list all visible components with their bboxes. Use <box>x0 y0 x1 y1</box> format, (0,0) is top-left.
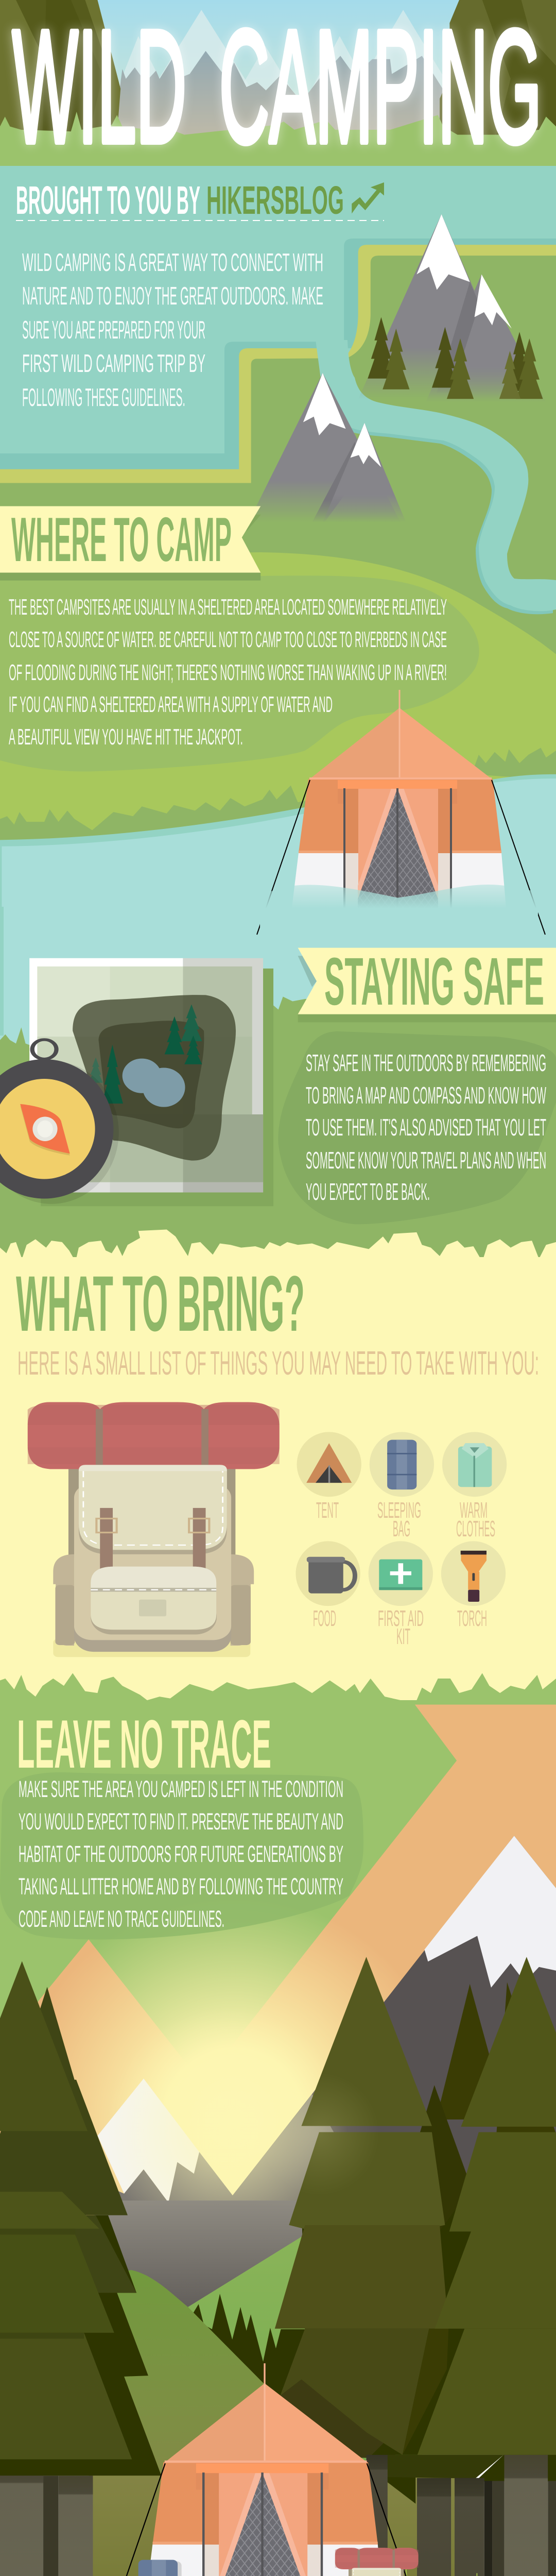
text block: A BEAUTIFUL VIEW YOU HAVE HIT THE JACKPOT. <box>9 724 243 750</box>
text backdrop <box>0 575 479 772</box>
right trees <box>259 1957 556 2455</box>
text backdrop <box>278 1031 556 1224</box>
item labels: FIRST AID <box>378 1606 424 1631</box>
map <box>29 958 273 1206</box>
icon: rising arrow <box>352 182 384 214</box>
brought to you by: HIKERSBLOG <box>206 178 344 223</box>
hill <box>0 552 556 845</box>
text block <box>306 1049 546 1205</box>
panel: staying safe <box>0 907 556 1263</box>
item labels: FOOD <box>313 1606 336 1631</box>
illustration: backpack <box>28 1402 280 1657</box>
text: intro: SURE YOU ARE PREPARED FOR YOUR <box>22 316 205 344</box>
brought to you by: BROUGHT TO YOU BY <box>16 178 200 223</box>
icon: tent <box>297 1432 361 1497</box>
item labels: BAG <box>393 1516 410 1541</box>
item: sleeping bag <box>138 2560 182 2576</box>
river <box>312 340 556 614</box>
panel: where to camp: WHERE TO CAMP <box>11 504 232 574</box>
tent in water <box>257 690 545 939</box>
item: backpack small <box>335 2548 419 2576</box>
text: intro: FIRST WILD CAMPING TRIP BY <box>22 350 205 378</box>
item labels: WARM <box>460 1498 488 1523</box>
item icons <box>296 1432 507 1649</box>
water <box>0 774 556 927</box>
banner <box>0 506 261 581</box>
grass strip <box>0 112 556 173</box>
trunks <box>43 2455 556 2576</box>
text: intro: FOLLOWING THESE GUIDELINES. <box>22 384 185 412</box>
snow mountain left <box>97 2079 390 2333</box>
panel: what to bring <box>0 1229 556 1710</box>
panel: leave no trace <box>0 1673 556 2344</box>
item labels: TENT <box>316 1498 339 1523</box>
mountains and trees: top right <box>358 214 546 402</box>
panel: header <box>0 0 556 654</box>
tent at camp <box>107 2363 426 2576</box>
text block: CODE AND LEAVE NO TRACE GUIDELINES. <box>19 1906 224 1932</box>
banner <box>298 948 556 1022</box>
item labels: SLEEPING <box>377 1498 421 1523</box>
camp gear <box>94 2548 445 2576</box>
icon: torch <box>441 1541 506 1606</box>
item icons: TORCH <box>457 1606 487 1631</box>
text block <box>19 1776 343 1932</box>
water and land map <box>0 166 556 854</box>
icon: warm clothes <box>442 1432 507 1497</box>
title: WILD <box>12 0 186 176</box>
grass blades <box>4 2567 553 2576</box>
text backdrop <box>0 1772 363 1940</box>
orange mountain <box>0 1705 556 2231</box>
icon: food <box>296 1541 360 1606</box>
item labels <box>313 1498 495 1649</box>
text block <box>9 595 447 750</box>
olive background <box>89 2470 458 2576</box>
dark tree shapes right <box>248 2200 556 2504</box>
text: intro <box>22 249 323 412</box>
hill <box>0 2270 319 2476</box>
gray and green valley <box>89 2198 496 2511</box>
icon: compass <box>0 1040 119 1204</box>
item labels: KIT <box>396 1624 410 1649</box>
snow mountain right <box>142 1836 556 2333</box>
mountains: lower <box>248 373 406 522</box>
panel: where to camp <box>0 504 556 1087</box>
scene: forest with tent <box>0 1957 556 2576</box>
grass <box>0 994 556 1263</box>
left trees <box>0 1961 161 2476</box>
icon: sleeping bag <box>370 1432 434 1497</box>
icon: first aid kit <box>369 1541 433 1606</box>
